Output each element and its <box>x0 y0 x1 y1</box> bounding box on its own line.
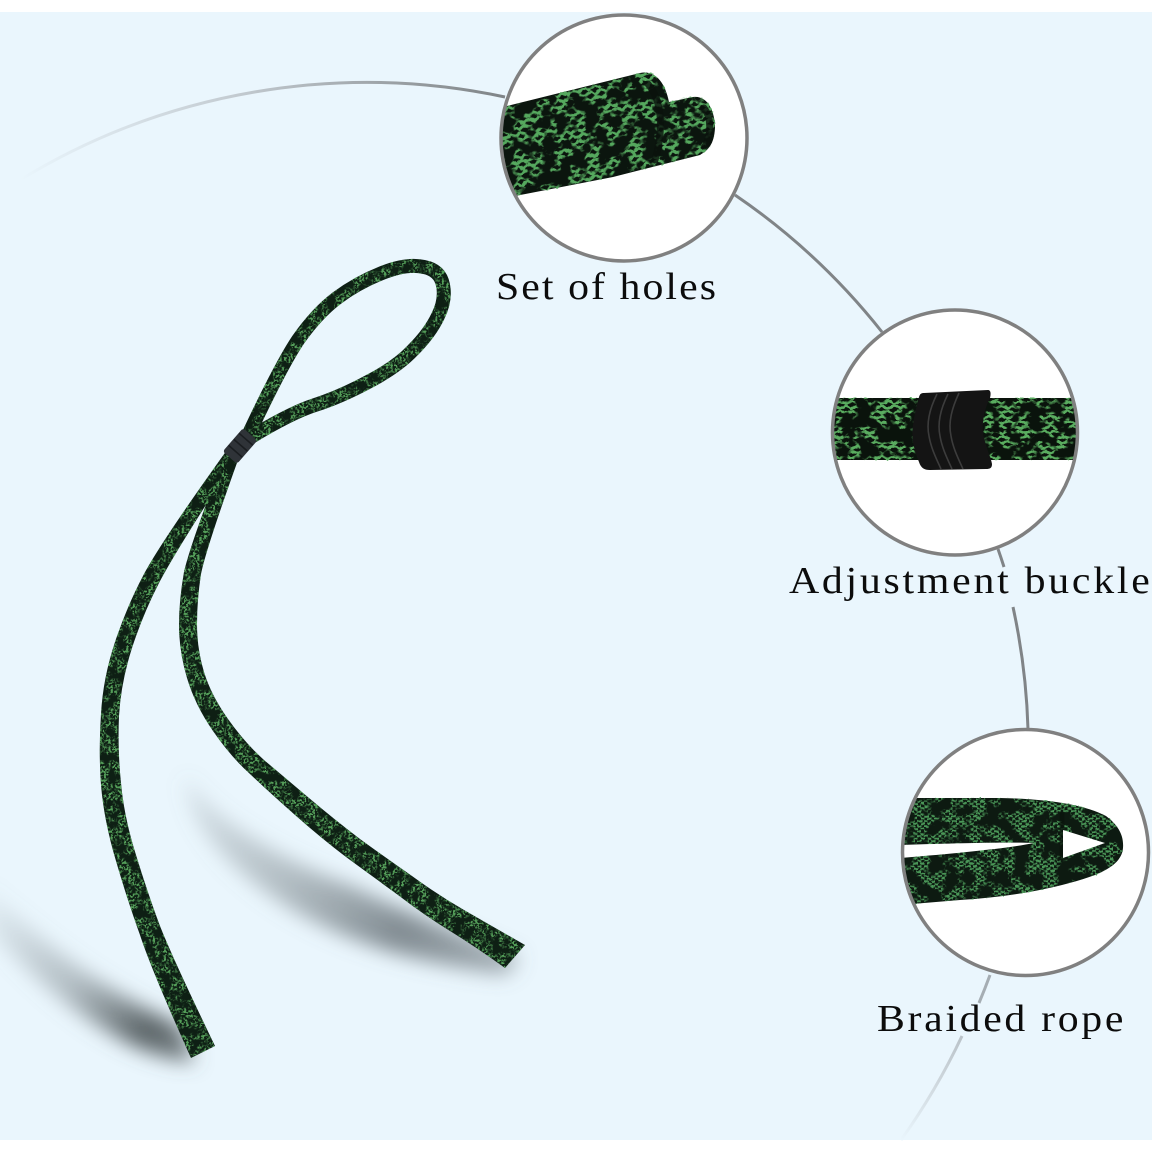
buckle body <box>912 390 992 470</box>
cord stitches <box>830 398 1080 460</box>
fold shading <box>1060 812 1064 860</box>
label: braided rope: Braided rope <box>877 997 1123 1040</box>
shadow: left strand <box>0 885 195 1062</box>
detail circle: set of holes <box>495 15 747 261</box>
cord base <box>830 398 1080 460</box>
strap left strand <box>100 450 236 1058</box>
shaded tube openings <box>648 84 710 160</box>
buckle on strap <box>223 428 257 464</box>
product: full braided strap <box>100 266 525 1058</box>
gap between strands <box>900 843 1034 858</box>
label: adjustment buckle: Adjustment buckle <box>789 559 1150 602</box>
cord tubes base <box>495 73 715 200</box>
strap loop <box>246 266 444 440</box>
strap right strand <box>179 454 525 968</box>
detail circle: adjustment buckle <box>830 310 1080 555</box>
shadow: right strand <box>186 775 520 975</box>
flat rope loop stitches <box>900 798 1123 905</box>
detail circle: braided rope <box>900 730 1148 976</box>
label: set of holes: Set of holes <box>496 265 716 308</box>
flat rope loop base <box>900 798 1123 905</box>
cord tubes stitches <box>495 73 715 200</box>
gap inside fold <box>1063 830 1105 858</box>
buckle ridges <box>928 393 963 469</box>
